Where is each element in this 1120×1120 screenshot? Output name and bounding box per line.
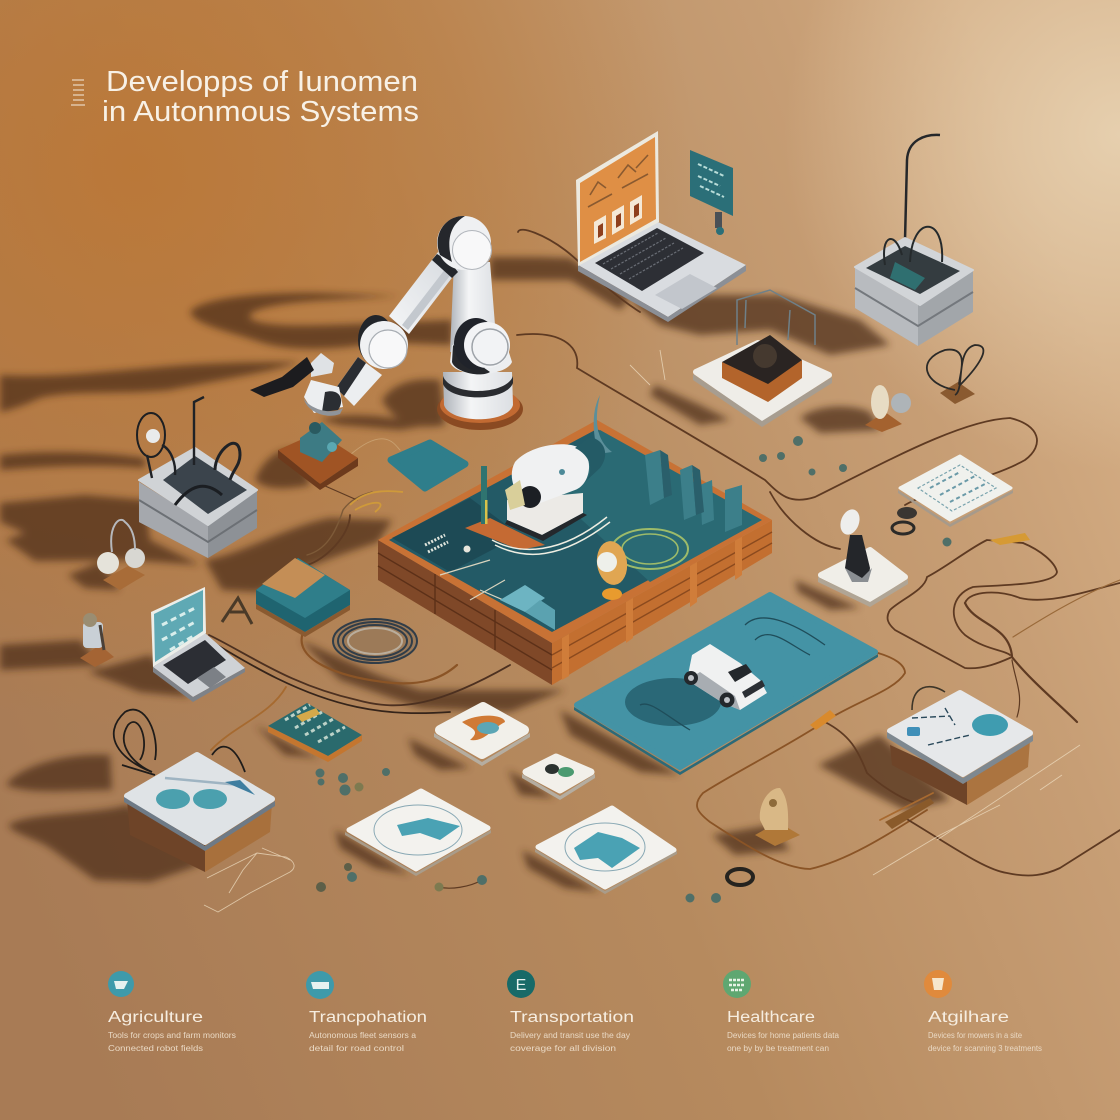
laptop screen (576, 131, 659, 266)
central board (378, 395, 772, 685)
small figure left (80, 613, 114, 667)
teal robot vacuum (256, 558, 350, 637)
cable coil (333, 619, 417, 663)
map tile left (345, 791, 491, 876)
black coil bottom left (114, 710, 156, 775)
icon: route: E (516, 977, 526, 994)
legend: agriculture: Agriculture (108, 1009, 203, 1026)
laptop top right (576, 131, 746, 322)
icon: vehicle (306, 971, 334, 999)
tripod (222, 598, 252, 624)
legend: healthcare: one by by be treatment can (727, 1044, 829, 1053)
black ring (727, 869, 753, 885)
title text (102, 66, 419, 128)
city blocks (594, 395, 612, 454)
legend: agriculture two: device for scanning 3 treatments (928, 1044, 1042, 1053)
title block (71, 66, 419, 128)
teal mat (574, 595, 878, 775)
cast shadows (0, 257, 950, 892)
small figure and coil right (865, 345, 983, 432)
title menu icon (71, 80, 85, 105)
legend: agriculture two: Devices for mowers in a site (928, 1031, 1023, 1040)
circuit board (268, 703, 362, 762)
gold figure (755, 788, 800, 846)
legend: agriculture (108, 971, 236, 1053)
white module left (124, 747, 275, 872)
title text: Developps of Iunomen (106, 66, 418, 98)
keyboard (595, 228, 704, 291)
white platform with device (693, 290, 832, 427)
golden squiggle (350, 491, 403, 512)
shoulder joint (437, 216, 492, 270)
legend: transportation one (306, 971, 427, 1053)
legend: transportation one: detail for road control (309, 1044, 404, 1053)
lower joint (454, 318, 510, 370)
title text: in Autonmous Systems (102, 96, 419, 128)
white module right (887, 687, 1033, 805)
legend: transportation two: Transportation (510, 1009, 634, 1026)
teal tile (391, 443, 465, 488)
small card orange figure (434, 707, 530, 766)
bin left (137, 397, 257, 558)
connector gadgets (810, 533, 1030, 829)
small card teal (522, 757, 595, 800)
board top (378, 420, 772, 643)
legend: agriculture two: Atgilhare (928, 1009, 1009, 1026)
small pebbles (316, 436, 952, 903)
legend: transportation one: Autonomous fleet sensors a (309, 1031, 417, 1040)
headset figure (97, 520, 145, 590)
white tile right (898, 456, 1013, 527)
car (684, 644, 767, 710)
robot base (437, 372, 523, 430)
legend: transportation one: Trancpohation (309, 1009, 427, 1026)
lower forearm (336, 357, 382, 406)
orange pin (594, 539, 630, 600)
legend: agriculture: Connected robot fields (108, 1044, 203, 1053)
icon: agriculture (108, 971, 134, 997)
upper arm (450, 262, 497, 352)
legend: transportation two (507, 970, 634, 1053)
sketched light lines (204, 350, 1080, 912)
joystick platform (818, 507, 917, 607)
central white machine (505, 437, 605, 541)
icon: healthcare (723, 970, 751, 998)
board sides (378, 540, 552, 685)
wrist and gripper (250, 353, 343, 416)
legend: healthcare: Devices for home patients data (727, 1031, 840, 1040)
legend: transportation two: Delivery and transit use the day (510, 1031, 630, 1040)
legend: transportation two: coverage for all division (510, 1044, 616, 1053)
legend: healthcare (723, 970, 840, 1053)
map tile right (535, 808, 677, 894)
icon: leaf (924, 970, 952, 998)
forearm (389, 252, 458, 334)
legend: agriculture: Tools for crops and farm monitors (108, 1031, 236, 1040)
robot arm (250, 216, 523, 430)
wires (209, 230, 1120, 888)
teal sign (690, 150, 733, 235)
small laptop left (151, 587, 245, 702)
legend: healthcare: Healthcare (727, 1009, 815, 1026)
small device left of board (278, 422, 358, 490)
legend: agriculture two (924, 970, 1042, 1053)
bin top right (855, 135, 973, 346)
elbow joint (358, 315, 408, 369)
